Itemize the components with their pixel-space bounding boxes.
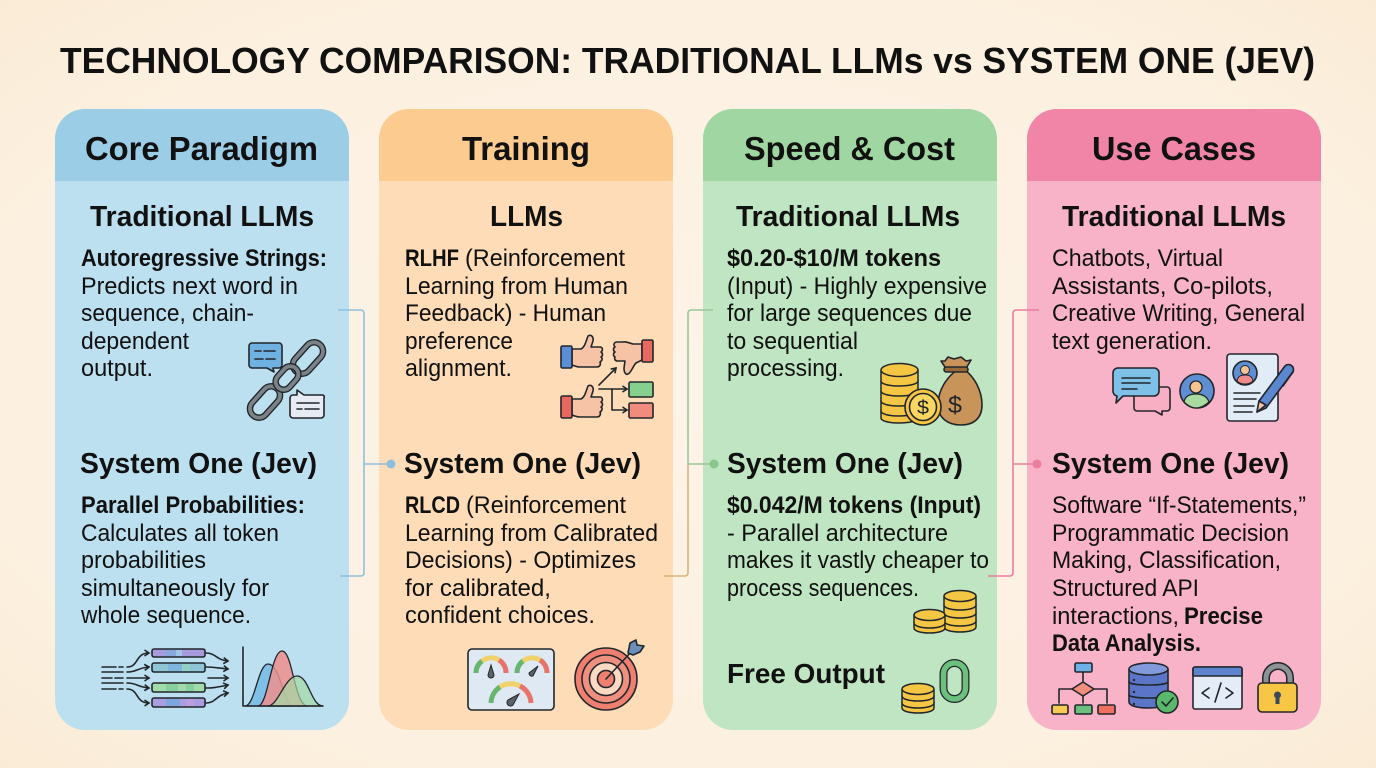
text: system one use cases: Making, Classification, <box>1052 547 1281 574</box>
icon: coins and money bag: $ <box>917 398 929 419</box>
icon: parallel token streams <box>102 647 323 707</box>
text: autoregressive strings: dependent <box>81 328 189 355</box>
icon: coins and money bag: $ <box>948 392 962 419</box>
connector: speed and cost to use cases <box>988 310 1042 576</box>
text: system one pricing: makes it vastly cheaper to <box>727 547 989 574</box>
text: RLHF: preference <box>405 328 513 355</box>
text: RLHF <box>405 245 628 382</box>
text: LLM pricing: (Input) - Highly expensive <box>727 273 987 300</box>
text: LLM pricing: to sequential <box>727 328 858 355</box>
subheading: system one: System One (Jev) <box>404 448 641 480</box>
text: RLHF: RLHF <box>405 245 459 272</box>
text: LLM pricing <box>727 245 987 382</box>
text: LLM use cases <box>1052 245 1305 355</box>
text: LLM pricing: $0.20-$10/M tokens <box>727 245 941 272</box>
subheading: traditional LLMs: Traditional LLMs <box>1062 201 1286 233</box>
heading: use cases: Use Cases <box>1092 130 1256 167</box>
text: RLHF: Learning from Human <box>405 273 628 300</box>
text: system one use cases: interactions, <box>1052 603 1179 630</box>
text: autoregressive strings: Predicts next word in <box>81 273 298 300</box>
text: autoregressive strings: sequence, chain- <box>81 300 254 327</box>
text: LLM pricing: for large sequences due <box>727 300 972 327</box>
text: LLM use cases: Assistants, Co-pilots, <box>1052 273 1273 300</box>
subheading: system one: System One (Jev) <box>727 448 963 480</box>
text: autoregressive strings <box>81 245 327 382</box>
text: RLHF: (Reinforcement <box>465 245 625 272</box>
connector: core paradigm to training <box>338 310 396 576</box>
text: RLHF: Feedback) - Human <box>405 300 606 327</box>
subheading: traditional LLMs: Traditional LLMs <box>90 201 314 233</box>
text: autoregressive strings: Autoregressive Strings: <box>81 245 327 272</box>
icon: decision flowchart <box>1052 663 1115 714</box>
text: LLM pricing: processing. <box>727 355 844 382</box>
icon: coin stacks <box>914 590 976 633</box>
text: LLM use cases: Creative Writing, General <box>1052 300 1305 327</box>
text: system one use cases: Data Analysis. <box>1052 630 1201 657</box>
text: system one pricing: process sequences. <box>727 575 919 602</box>
label: free output: Free Output <box>727 658 885 689</box>
heading: speed and cost: Speed & Cost <box>744 130 955 167</box>
text: system one use cases: Structured API <box>1052 575 1199 602</box>
text: system one use cases: Software “If-Statements,” <box>1052 492 1306 519</box>
text: parallel probabilities: simultaneously for <box>81 575 269 602</box>
icon: coins and money bag <box>881 357 982 425</box>
icon: human feedback thumbs <box>561 335 653 418</box>
text: system one use cases <box>1052 492 1306 657</box>
icon: calibration gauges <box>468 640 644 710</box>
icon: broken chain with speech bubbles <box>246 339 327 421</box>
icon: code window <box>1193 667 1242 709</box>
subheading: system one: System One (Jev) <box>80 448 317 480</box>
text: RLCD <box>405 492 658 629</box>
title: TECHNOLOGY COMPARISON: TRADITIONAL LLMs vs SYSTEM ONE (JEV) <box>60 40 1315 81</box>
text: parallel probabilities: whole sequence. <box>80 602 251 629</box>
text: LLM use cases: Chatbots, Virtual <box>1052 245 1223 272</box>
subheading: LLMs: LLMs <box>490 201 563 233</box>
text: RLCD: RLCD <box>405 492 460 519</box>
subheading: traditional LLMs: Traditional LLMs <box>736 201 960 233</box>
icon: padlock <box>1258 666 1297 712</box>
heading: core paradigm: Core Paradigm <box>85 130 318 167</box>
icon: chat, avatar and document with pen <box>1113 354 1294 421</box>
icon: coins and zero <box>902 663 966 713</box>
icon: database with check <box>1129 663 1178 713</box>
text: RLCD: Learning from Calibrated <box>405 520 658 547</box>
text: RLCD: (Reinforcement <box>466 492 626 519</box>
text: system one pricing: $0.042/M tokens (Input) <box>727 492 981 519</box>
text: autoregressive strings: output. <box>81 355 153 382</box>
panel: speed and cost <box>703 109 997 730</box>
panel: training <box>379 109 673 730</box>
heading: training: Training <box>462 130 590 167</box>
text: system one use cases: Programmatic Decision <box>1052 520 1289 547</box>
text: system one pricing: - Parallel architecture <box>727 520 948 547</box>
text: system one use cases: Precise <box>1184 603 1263 630</box>
text: parallel probabilities: probabilities <box>81 547 206 574</box>
text: RLHF: alignment. <box>405 355 512 382</box>
text: RLCD: Decisions) - Optimizes <box>405 547 636 574</box>
text: RLCD: for calibrated, <box>405 575 551 602</box>
panel: use cases <box>1027 109 1321 730</box>
text: parallel probabilities <box>80 492 305 629</box>
text: LLM use cases: text generation. <box>1052 328 1212 355</box>
text: RLCD: confident choices. <box>405 602 595 629</box>
subheading: system one: System One (Jev) <box>1052 448 1289 480</box>
connector: training to speed and cost <box>664 310 718 576</box>
text: parallel probabilities: Calculates all token <box>81 520 279 547</box>
text: parallel probabilities: Parallel Probabilities: <box>81 492 305 519</box>
text: system one pricing <box>727 492 989 602</box>
panel: core paradigm <box>55 109 349 730</box>
